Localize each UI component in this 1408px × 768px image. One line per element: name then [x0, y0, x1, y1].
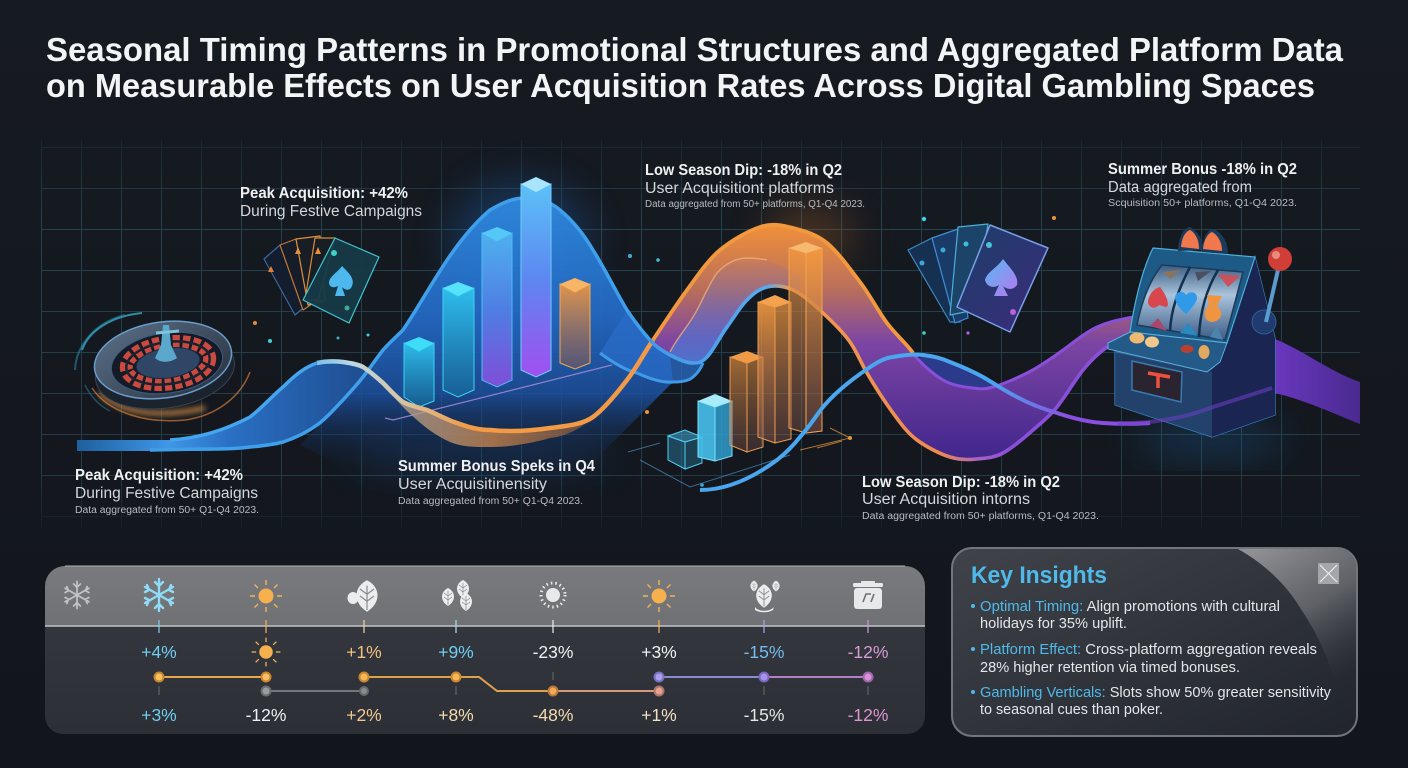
values row two: +8%	[438, 705, 474, 725]
roulette wheel	[75, 313, 250, 421]
purple top curve	[913, 315, 1145, 389]
callout: summer bonus centre: User Acquisitinensity	[398, 476, 547, 493]
callout: summer bonus right	[1108, 161, 1297, 209]
timeline dots	[154, 672, 872, 696]
values row two: +2%	[346, 705, 382, 725]
icon: three leaves	[442, 580, 472, 611]
values row one: +9%	[438, 642, 474, 662]
blue curve: big hill line	[150, 198, 650, 450]
glow behind curves	[350, 180, 1285, 473]
bullet: platform effect	[971, 641, 1317, 676]
icon: sun	[643, 580, 675, 612]
values row one: -15%	[744, 642, 784, 662]
callout: peak acquisition bottom: During Festive Campaigns	[75, 485, 258, 502]
values row one: +4%	[141, 642, 177, 662]
screen housing	[1130, 248, 1255, 343]
front card	[957, 225, 1048, 332]
icon: sun	[250, 580, 282, 612]
callout: summer bonus right: Summer Bonus -18% in Q2	[1108, 161, 1297, 178]
callout: peak acquisition bottom	[75, 467, 259, 516]
panel: key insights	[952, 548, 1357, 736]
callout: peak acquisition top: Peak Acquisition: +42%	[240, 185, 408, 202]
values row two: -12%	[848, 705, 888, 725]
callout: peak acquisition bottom: Peak Acquisition: +42%	[75, 467, 243, 484]
values row two	[141, 705, 888, 725]
bar base plane	[628, 428, 850, 487]
motion swirls	[75, 313, 250, 421]
orange trough band	[383, 383, 593, 447]
bullet: optimal timing: holidays for 35% uplift.	[980, 615, 1127, 632]
callout: low season bottom: Low Season Dip: -18% in Q2	[862, 474, 1060, 491]
callout: low season top: User Acquisitiont platforms	[645, 180, 834, 197]
bullet: optimal timing	[971, 598, 1280, 632]
blue lower ribbon	[600, 310, 703, 382]
bar chart: orange hill bars	[668, 242, 822, 469]
callout: peak acquisition bottom: Data aggregated from 50+ Q1-Q4 2023.	[75, 505, 259, 516]
reel symbols	[1148, 270, 1240, 340]
values row two: -15%	[744, 705, 784, 725]
bullet: gambling verticals	[971, 684, 1331, 718]
values row one: -23%	[533, 642, 573, 662]
blue second curve	[700, 355, 1150, 490]
blue curve: upper edge	[170, 363, 317, 440]
values row one	[141, 642, 888, 662]
icon: snowflake grey	[65, 581, 89, 609]
axis line under bars	[385, 365, 612, 420]
panel: seasonal timeline	[45, 566, 925, 734]
callout: summer bonus centre: Data aggregated from 50+ Q1-Q4 2023.	[398, 496, 583, 507]
callout: low season bottom	[862, 474, 1099, 522]
silver and orange trough curve	[317, 340, 653, 431]
slot machine	[1108, 227, 1292, 437]
blue tint under hill	[670, 258, 800, 363]
console	[1108, 332, 1227, 372]
number ring	[123, 336, 213, 390]
values row two: -12%	[246, 705, 286, 725]
mini sun	[252, 638, 280, 666]
orange curve	[653, 225, 913, 353]
icon: sprout	[750, 581, 780, 612]
values row two: -48%	[533, 705, 573, 725]
callout: summer bonus centre: Summer Bonus Speks in Q4	[398, 458, 595, 475]
values row one: +1%	[346, 642, 382, 662]
blue hill area	[300, 198, 673, 465]
icon: pale sun	[541, 583, 565, 607]
lever	[1252, 247, 1292, 334]
orange and purple ribbon area	[653, 225, 1145, 460]
callout: summer bonus right: Data aggregated from	[1108, 179, 1252, 196]
title: on Measurable Effects on User Acquisition Rates Across Digital Gambling Spaces	[46, 67, 1315, 104]
callout: low season top	[645, 162, 865, 210]
callout: low season top: Low Season Dip: -18% in Q2	[645, 162, 842, 179]
bullet: platform effect: Platform Effect: Cross-platform aggregation reveals	[980, 641, 1317, 658]
purple band through cabinet	[1118, 388, 1272, 423]
bar chart: blue hill bars	[404, 177, 590, 407]
purple right ribbon	[1270, 337, 1360, 424]
tick marks	[159, 620, 868, 695]
icon: leaf	[348, 580, 378, 612]
spindle	[155, 325, 177, 362]
display	[1132, 361, 1182, 402]
title	[46, 31, 1344, 104]
wave chart	[77, 177, 1360, 490]
reels	[1137, 265, 1243, 340]
bullet: platform effect: 28% higher retention via timed bonuses.	[980, 659, 1240, 676]
icon: calendar bin	[853, 581, 883, 609]
connector lines	[159, 677, 868, 691]
callout: summer bonus right: Scquisition 50+ platforms, Q1-Q4 2023.	[1108, 198, 1297, 209]
top fins	[1178, 227, 1204, 251]
dark patch between curves	[918, 357, 995, 389]
inner curve blue to orange to purple	[650, 286, 1125, 460]
bullet: gambling verticals: Gambling Verticals: Slots show 50% greater sensitivity	[980, 684, 1331, 701]
callout: peak acquisition top	[240, 185, 422, 220]
bullet: gambling verticals: to seasonal cues than poker.	[980, 701, 1163, 718]
icon: snowflake blue	[145, 579, 173, 611]
callout: summer bonus centre	[398, 458, 595, 507]
callout: low season bottom: Data aggregated from 50+ platforms, Q1-Q4 2023.	[862, 511, 1099, 522]
values row one: -12%	[848, 642, 888, 662]
callout: peak acquisition top: During Festive Campaigns	[240, 203, 422, 220]
heading: Key Insights	[971, 562, 1107, 589]
playing cards left	[264, 236, 379, 323]
sparkle dots	[253, 216, 1056, 487]
inner light orange line	[670, 258, 767, 352]
values row two: +1%	[641, 705, 677, 725]
playing cards right	[908, 224, 1048, 332]
callout: low season bottom: User Acquisition intorns	[862, 491, 1030, 508]
title: Seasonal Timing Patterns in Promotional Structures and Aggregated Platform Data	[46, 31, 1344, 68]
bullet: optimal timing: Optimal Timing: Align promotions with cultural	[980, 598, 1280, 615]
values row one: +3%	[641, 642, 677, 662]
callout: low season top: Data aggregated from 50+ platforms, Q1-Q4 2023.	[645, 199, 865, 210]
buttons	[1130, 332, 1210, 359]
front card	[303, 238, 379, 323]
blue curve: first bump ribbon	[77, 361, 372, 451]
values row two: +3%	[141, 705, 177, 725]
close icon	[1318, 563, 1339, 584]
cabinet	[1115, 257, 1275, 437]
